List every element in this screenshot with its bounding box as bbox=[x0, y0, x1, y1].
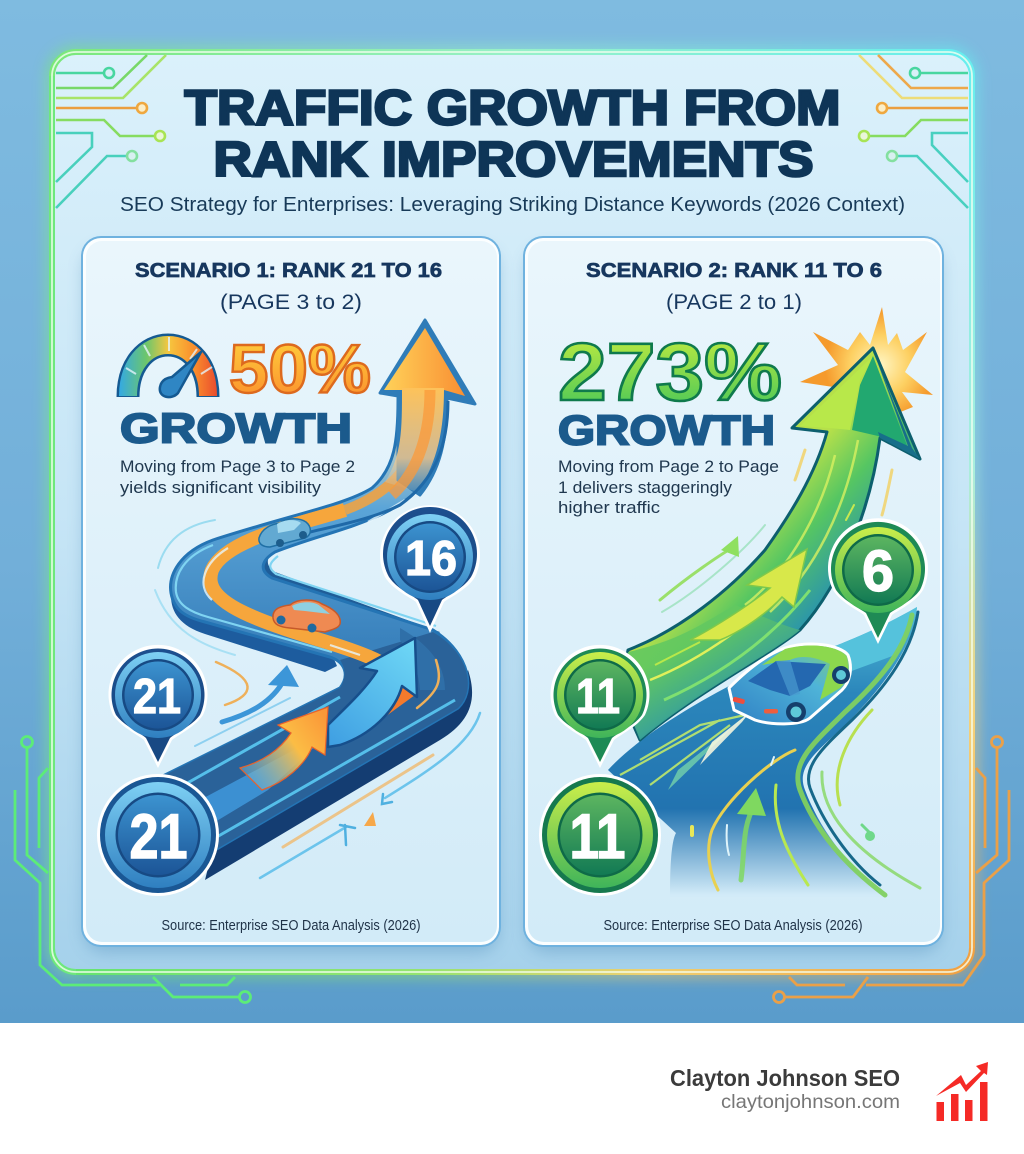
badge: rank 11 lower: 11 bbox=[570, 802, 626, 872]
icon: sunburst bbox=[800, 307, 933, 420]
icon: blue car bbox=[259, 519, 310, 547]
road arrow: blue bbox=[328, 638, 417, 747]
description: 1 delivers staggeringly bbox=[558, 478, 733, 497]
map pin: rank 21 upper bbox=[109, 645, 207, 768]
stat: 273 percent: 273% bbox=[558, 327, 782, 418]
road side depth bbox=[205, 670, 472, 880]
icon: speedometer gauge bbox=[126, 337, 212, 397]
map pin: rank 11 upper bbox=[550, 645, 649, 768]
side swoosh lines bbox=[822, 710, 920, 888]
outer neon frame bbox=[52, 52, 972, 972]
centre orange lane bbox=[345, 400, 425, 510]
swoosh dot bbox=[865, 831, 875, 841]
road light edge bbox=[176, 545, 436, 652]
title: RANK IMPROVEMENTS bbox=[214, 133, 814, 187]
road arrow: lime bbox=[690, 549, 807, 640]
orange flame behind blue arrow bbox=[355, 680, 415, 735]
scenario 1 heading: (PAGE 3 to 2) bbox=[220, 291, 362, 314]
description bbox=[558, 457, 779, 517]
description: Moving from Page 3 to Page 2 bbox=[120, 457, 355, 476]
map pin: rank 21 upper: 21 bbox=[133, 670, 181, 724]
circuit traces: bottom left bbox=[15, 736, 250, 1002]
scenario 2 heading: SCENARIO 2: RANK 11 TO 6 bbox=[586, 260, 882, 282]
scenario 1 heading: SCENARIO 1: RANK 21 TO 16 bbox=[135, 260, 442, 282]
title bbox=[184, 82, 840, 187]
subtitle: SEO Strategy for Enterprises: Leveraging Striking Distance Keywords (2026 Context) bbox=[120, 193, 905, 216]
badge: rank 21 lower bbox=[97, 774, 219, 896]
map pin: rank 6 bbox=[828, 518, 928, 644]
description bbox=[120, 457, 355, 497]
footer url: claytonjohnson.com bbox=[721, 1091, 900, 1113]
icon: orange car bbox=[273, 600, 340, 632]
description: higher traffic bbox=[558, 498, 661, 517]
exhaust streak bbox=[668, 712, 752, 790]
green rising arrow bbox=[620, 348, 920, 740]
description: Moving from Page 2 to Page bbox=[558, 457, 779, 476]
icon: red bar chart logo bbox=[936, 1062, 988, 1121]
motion streaks bbox=[155, 520, 480, 878]
panel: scenario 1 bbox=[81, 236, 501, 952]
map pin: rank 6: 6 bbox=[862, 539, 894, 604]
motion arrow head bbox=[721, 536, 739, 557]
map pin: rank 16 bbox=[380, 505, 480, 633]
circuit traces: top left bbox=[56, 55, 166, 208]
title: TRAFFIC GROWTH FROM bbox=[184, 82, 840, 136]
source note: Source: Enterprise SEO Data Analysis (2026) bbox=[162, 918, 420, 934]
big arrow head bbox=[380, 320, 475, 495]
lower road dark band bbox=[165, 632, 468, 850]
motion arrow: light green bbox=[660, 450, 892, 612]
icon: sports car bbox=[729, 644, 850, 724]
road arrow: orange bbox=[240, 707, 328, 790]
winding road with rising arrow bbox=[165, 320, 475, 880]
source note: Source: Enterprise SEO Data Analysis (2026) bbox=[604, 918, 862, 934]
map pin: rank 11 upper: 11 bbox=[576, 670, 620, 724]
description: yields significant visibility bbox=[120, 478, 322, 497]
footer brand name: Clayton Johnson SEO bbox=[670, 1065, 900, 1091]
scenario 2 heading bbox=[586, 260, 882, 314]
road surface bbox=[165, 400, 468, 850]
lower road bbox=[608, 607, 918, 897]
badge: rank 11 lower bbox=[539, 774, 661, 896]
motion arrow head bbox=[268, 665, 299, 687]
map pin: rank 16: 16 bbox=[405, 532, 457, 586]
circuit traces: top right bbox=[859, 55, 968, 208]
panel: scenario 2 bbox=[523, 236, 944, 952]
scenario 1 heading bbox=[135, 260, 442, 314]
stat: 50 percent: 50% bbox=[229, 330, 371, 408]
circuit traces: bottom right bbox=[774, 736, 1009, 1002]
growth label: GROWTH bbox=[120, 404, 352, 452]
scenario 2 heading: (PAGE 2 to 1) bbox=[666, 291, 802, 314]
badge: rank 21 lower: 21 bbox=[130, 802, 188, 872]
growth label: GROWTH bbox=[558, 406, 775, 454]
small orange arrow tip bbox=[364, 812, 376, 826]
footer band bbox=[0, 1023, 1024, 1154]
